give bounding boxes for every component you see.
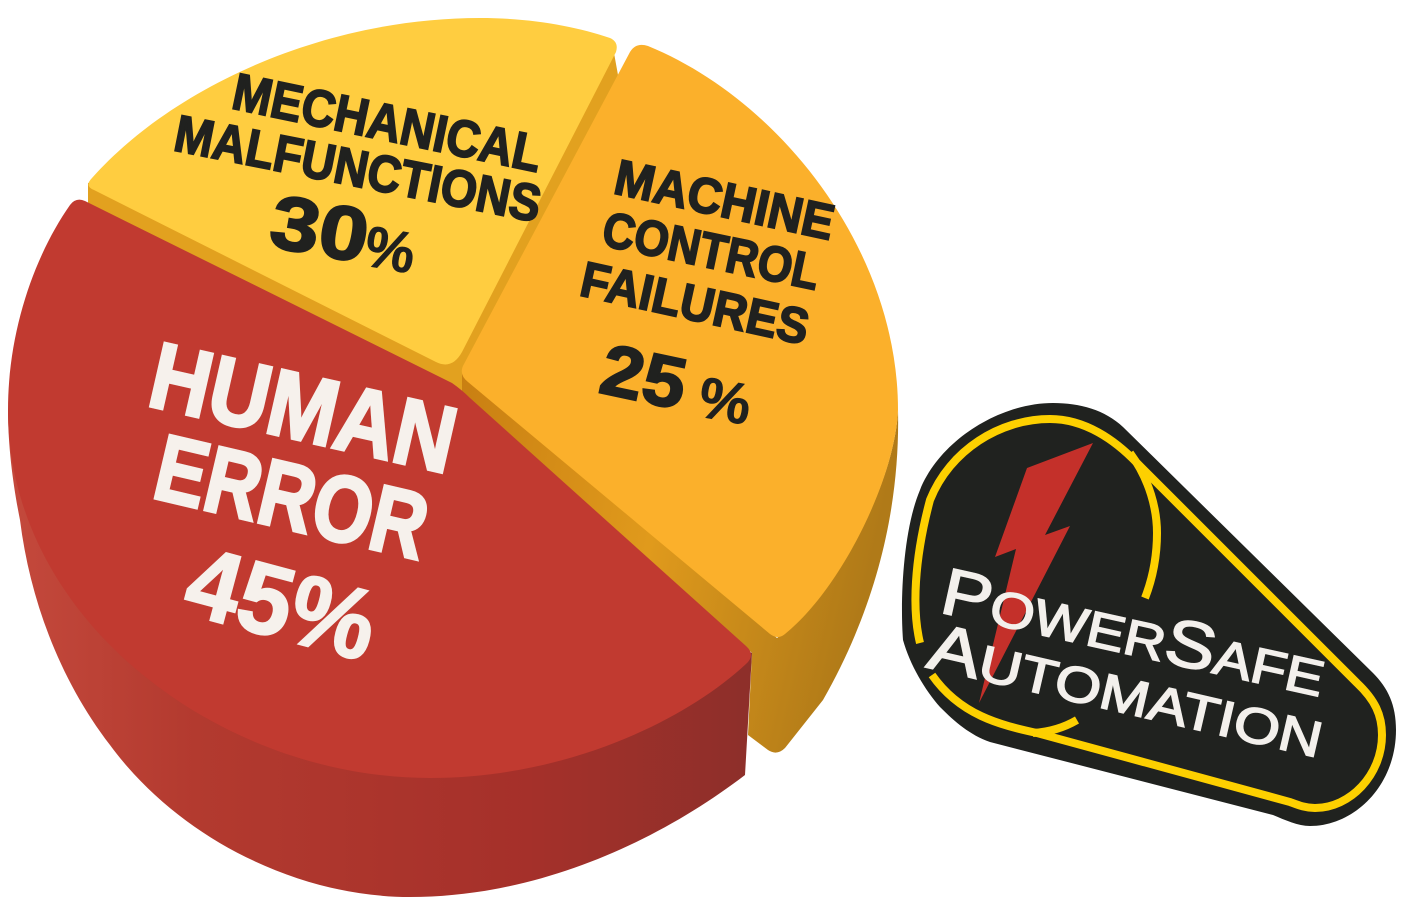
icon: red lightning bolt — [979, 443, 1093, 703]
label: mechanical malfunctions: % — [360, 214, 420, 286]
label: machine control failures: % — [694, 365, 756, 438]
label: machine control failures: CONTROL — [598, 201, 825, 301]
yellow outline — [915, 419, 1382, 808]
label: human error: 45% — [174, 525, 389, 683]
label: mechanical malfunctions — [170, 63, 547, 286]
label: human error: HUMAN — [141, 322, 466, 493]
logo text: AUTOMATION — [922, 609, 1331, 771]
label: human error — [141, 322, 466, 683]
logo text — [922, 553, 1333, 771]
label: human error: ERROR — [145, 414, 438, 579]
label: machine control failures: 25 — [594, 329, 693, 425]
label: machine control failures — [576, 149, 839, 438]
logo text: POWERSAFE — [935, 553, 1333, 710]
label: mechanical malfunctions: MALFUNCTIONS — [170, 105, 546, 234]
label: machine control failures: MACHINE — [610, 149, 839, 251]
label: mechanical malfunctions: 30 — [264, 179, 375, 280]
slice: human error 45% — [8, 200, 752, 897]
pie chart — [8, 18, 898, 897]
badge body — [902, 403, 1396, 826]
slice: mechanical malfunctions 30% — [88, 18, 618, 405]
label: mechanical malfunctions: MECHANICAL — [228, 63, 547, 184]
slice: machine control failures 25% — [462, 45, 898, 753]
logo badge: PowerSafe Automation — [902, 403, 1396, 826]
label: machine control failures: FAILURES — [576, 251, 814, 356]
